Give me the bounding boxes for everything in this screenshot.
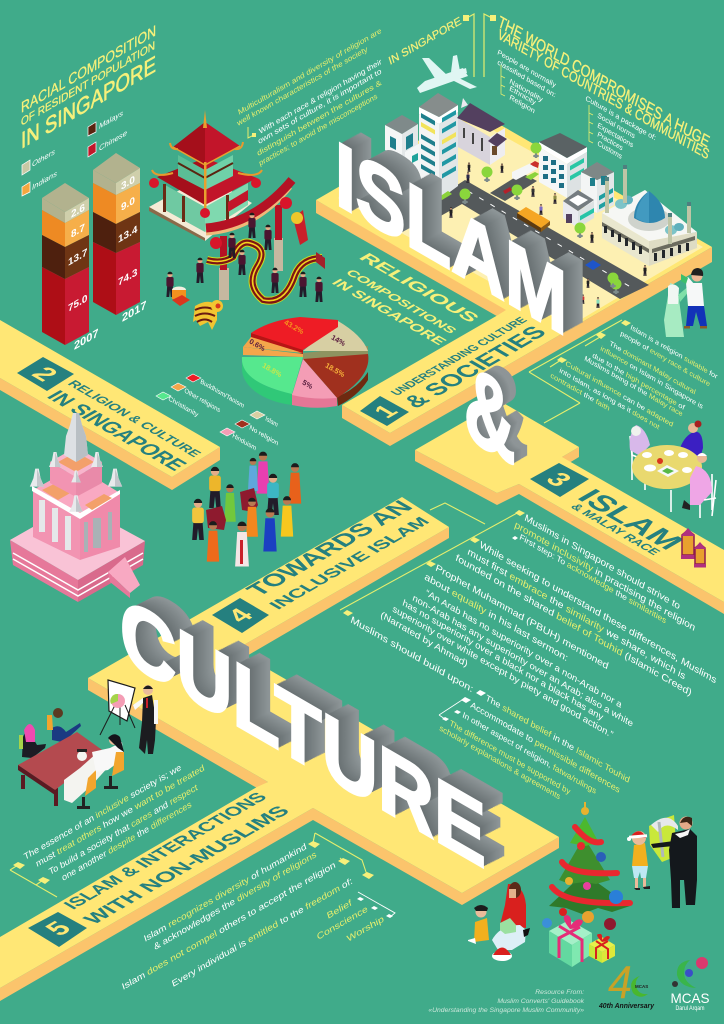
- pie chart: religion shares: 18.5%: [324, 360, 346, 380]
- text: section 5 religious freedom: & acknowledges the diversity of religions: [153, 849, 318, 952]
- text: section 4 towards inclusive islam: promote inclusivity in practising the religion: [513, 519, 697, 633]
- legend: religions: Hinduism: [231, 432, 257, 452]
- illustration: business meeting: [18, 680, 158, 809]
- text: section 4 towards inclusive islam: The shared belief in the Islamic Touhid: [484, 692, 631, 785]
- bar 2017: 2017: [122, 297, 147, 325]
- illustration: dragon dance: [166, 210, 325, 306]
- heading: religious compositions: [328, 250, 484, 347]
- legend: religions: Other religions: [183, 387, 221, 414]
- text: section 1 islam and culture: [549, 324, 719, 431]
- text: section 5 inclusive society: one another despite the differences: [61, 799, 193, 883]
- heading: islam and malay race: & MALAY RACE: [567, 501, 664, 557]
- text: classification lists: Expectations: [596, 122, 634, 150]
- text: resource credit: «Understanding the Singapore Muslim Community»: [428, 1007, 584, 1014]
- text: section 5 religious freedom: Islam does not compel others to accept the religion: [121, 859, 337, 992]
- text: section 1 islam and culture: Cultural influence can be adapted: [564, 360, 674, 429]
- building: right tower: [581, 162, 614, 213]
- text: section 4 towards inclusive islam: First step: To acknowledge the similarities: [518, 532, 667, 625]
- text: section 5 inclusive society: The essence of an inclusive society is; we: [23, 762, 182, 862]
- text: multiculturalism paragraph: With each race & religion having their: [258, 57, 383, 136]
- illustration: father giving gift to boy: [627, 815, 697, 908]
- text: section 1 islam and culture: into Islam, as long as it does not: [558, 367, 660, 431]
- bar chart: racial composition: [42, 153, 147, 353]
- text: section 1 islam and culture: contradict the faith: [549, 372, 611, 413]
- text: multiculturalism paragraph: practices; to avoid the misconceptions: [258, 91, 379, 168]
- text: section 1 islam and culture: people of every race & culture: [619, 330, 711, 389]
- legend: religions: Christianity: [167, 395, 200, 419]
- number box 2: 2: [25, 363, 64, 385]
- number box 1 and heading: UNDERSTANDING CULTURE: [387, 315, 530, 398]
- number box 5: [28, 912, 87, 947]
- text: multiculturalism paragraph: well known characteristics of the society: [235, 44, 369, 128]
- heading: towards an inclusive islam: INCLUSIVE ISLAM: [265, 514, 434, 612]
- bar 2007: 2007: [74, 325, 99, 353]
- logo: 40th anniversary: 40th Anniversary: [598, 1001, 655, 1010]
- icon: airplane: [417, 55, 477, 93]
- panel: ampersand platform and band 3: [415, 401, 724, 614]
- text: section 4 towards inclusive islam: non-Arab has any superiority over an Arab; also a white: [411, 592, 634, 729]
- text: resource credit: Resource From:: [535, 989, 584, 996]
- text: section 5 religious freedom: Conscience: [316, 903, 369, 942]
- text: section 4 towards inclusive islam: In other aspect of religion, fatwa/rulings: [461, 710, 597, 796]
- text: section 4 towards inclusive islam: superiority over white except by piety and good action.”: [391, 603, 614, 740]
- heading: religion and culture in singapore: RELIGION & CULTURE: [64, 378, 205, 459]
- heading: religious compositions: RELIGIOUS: [355, 250, 484, 325]
- text: classification lists: Religion: [508, 94, 536, 115]
- pie chart: religion shares: 18.8%: [261, 360, 283, 380]
- building: mosque: [602, 165, 697, 266]
- text: classification lists: Culture is a package of:: [584, 95, 657, 142]
- icon: lion dance: [193, 300, 223, 330]
- icon: gifts: [549, 915, 615, 967]
- text: section 4 towards inclusive islam: The difference must be supported by: [448, 718, 571, 796]
- illustration: chinese pagoda: [149, 110, 262, 241]
- legend: religions: Buddhism/Taoism: [199, 378, 245, 410]
- text: section 4 towards inclusive islam: founded on the shared belief of Touhid (Islamic Creed): [454, 552, 693, 698]
- logo: mcas darul arqam: Darul Arqam: [676, 1005, 704, 1012]
- 3D title: ISLAM: ISLAM: [335, 122, 567, 357]
- text: multiculturalism paragraph: distinguish between the cultures &: [256, 78, 382, 158]
- building: church: [457, 98, 507, 165]
- text: multiculturalism paragraph: own sets of culture, it is important to: [257, 66, 383, 146]
- heading: in singapore with bracket: [387, 14, 496, 77]
- brackets: section 4: [340, 503, 525, 616]
- heading: islam and interactions: WITH NON-MUSLIMS: [79, 803, 295, 928]
- heading: religious compositions: IN SINGAPORE: [328, 276, 451, 347]
- text: classification lists: Social norms: [596, 112, 636, 141]
- heading: religious compositions: COMPOSITIONS: [342, 267, 460, 336]
- text: section 4 towards inclusive islam: [349, 512, 718, 801]
- building: small front block: [563, 190, 594, 228]
- illustration: christmas tree: [542, 802, 630, 930]
- text: section 5 religious freedom: Every individual is entitled to the freedom of:: [171, 875, 354, 989]
- heading: racial composition: OF RESIDENT POPULATION: [21, 38, 155, 129]
- heading: in singapore with bracket: IN SINGAPORE: [387, 15, 463, 68]
- text: section 4 towards inclusive islam: about equality in his last sermon:: [423, 571, 569, 663]
- pie chart: religion shares: 43.2%: [283, 317, 305, 337]
- text: section 5 inclusive society: must treat others how we want to be treated: [35, 762, 206, 869]
- text: section 1 islam and culture: The dominant Malay cultural: [608, 340, 697, 397]
- text: section 1 islam and culture: influence on Islam in Singapore is: [599, 345, 704, 411]
- bar 2007: [42, 183, 99, 353]
- illustration: mother and child: [468, 882, 530, 961]
- number box 3: [530, 463, 589, 497]
- legend: religions: [156, 374, 279, 452]
- number box 4: 4: [221, 604, 260, 627]
- panel: culture platform with bands 4 and 5: [0, 497, 559, 1001]
- text: section 4 towards inclusive islam: Accommodate to permissible differences: [469, 699, 621, 795]
- text: section 4 towards inclusive islam: must first embrace the similarity we share, which is: [466, 546, 687, 682]
- legend: racial groups: Chinese: [99, 128, 127, 153]
- text: section 5 religious freedom: Worship: [346, 913, 385, 944]
- brackets: section 1: [529, 320, 631, 423]
- pie chart: religion shares: 14%: [330, 332, 346, 349]
- number box 1 and heading: [360, 315, 553, 426]
- bar 2007: 75.0: [68, 292, 87, 315]
- text: section 4 towards inclusive islam: Muslims should build upon:: [349, 614, 475, 694]
- text: section 5 inclusive society: To build a society that cares and respect: [48, 782, 199, 877]
- number box 5: 5: [39, 917, 78, 940]
- text: multiculturalism paragraph: [235, 26, 383, 168]
- bar 2017: 74.3: [118, 266, 137, 289]
- text: section 1 islam and culture: Muslims being of the Malay race: [583, 355, 684, 419]
- text: section 1 islam and culture: Islam is a religion suitable for: [629, 324, 719, 381]
- bar 2017: [93, 153, 147, 325]
- legend: religions: Islam: [264, 415, 279, 429]
- legend: religions: No religion: [248, 424, 279, 448]
- building: tall tower: [419, 93, 458, 200]
- panel: band 2: [0, 320, 220, 490]
- heading: religion and culture in singapore: IN SINGAPORE: [42, 387, 192, 474]
- heading: racial composition: RACIAL COMPOSITION: [21, 22, 156, 117]
- pie chart: religion shares: 0.6%: [248, 336, 266, 354]
- bar 2007: 13.7: [68, 246, 87, 269]
- pie chart: religion shares: [242, 317, 368, 408]
- logo: mcas darul arqam: [670, 957, 710, 1012]
- text: classification lists: classified based on:: [496, 59, 557, 99]
- bar 2007: 8.7: [71, 222, 85, 241]
- icon: lanterns: [681, 528, 706, 568]
- text: multiculturalism paragraph: Multiculturalism and diversity of religion are: [237, 26, 382, 117]
- text: section 5 religious freedom: Belief: [326, 897, 353, 921]
- number box 1 and heading: & SOCIETIES: [398, 322, 553, 412]
- bar 2017: 9.0: [121, 195, 135, 214]
- number box 4: [212, 598, 269, 633]
- illustration: greeting couple: [664, 268, 707, 337]
- text: section 5 religious freedom: [121, 841, 395, 992]
- 3D title: CULTURE: CULTURE: [120, 577, 486, 889]
- brackets: section 5: [10, 833, 374, 897]
- logo: 40th anniversary: [598, 956, 655, 1010]
- legend: racial groups: [22, 109, 127, 196]
- text: section 4 towards inclusive islam: Muslims in Singapore should strive to: [523, 512, 681, 611]
- building: mid block: [539, 133, 587, 198]
- trees, vehicles and pedestrians: [439, 142, 647, 308]
- legend: racial groups: Indians: [32, 169, 57, 192]
- logo: 40th anniversary: 4: [608, 956, 632, 1008]
- illustration: hindu temple: [10, 413, 145, 602]
- illustration: indian community group: [192, 452, 301, 566]
- bar 2017: 3.0: [121, 174, 135, 193]
- text: section 4 towards inclusive islam: (Narrated by Ahmad): [379, 609, 469, 669]
- heading: islam and interactions: ISLAM & INTERACTIONS: [59, 789, 271, 912]
- text: classification lists: Ethnicity: [508, 85, 537, 107]
- legend: racial groups: Others: [32, 147, 55, 169]
- text: section 4 towards inclusive islam: has no superiority over a black nor a black has any: [401, 597, 605, 723]
- road: [437, 173, 649, 299]
- text: section 4 towards inclusive islam: Prophet Muhammad (PBUH) mentioned: [434, 562, 610, 671]
- number box 2: [17, 357, 74, 391]
- logo: mcas darul arqam: MCAS: [670, 990, 710, 1006]
- pie chart: religion shares: 5%: [301, 377, 314, 391]
- text: section 5 religious freedom: Islam recognizes diversity of humankind: [143, 841, 308, 944]
- text: classification lists: Nationality: [508, 78, 544, 104]
- logo: 40th anniversary: MCAS: [635, 984, 648, 989]
- building: small left block: [385, 115, 428, 172]
- number box 3: 3: [539, 468, 578, 491]
- heading: towards an inclusive islam: TOWARDS AN: [241, 497, 419, 600]
- illustration: family dining table: [630, 420, 716, 518]
- text: resource credit: [428, 989, 585, 1014]
- text: section 4 towards inclusive islam: scholarly explanations & agreements: [438, 723, 561, 801]
- number box 1 and heading: 1: [368, 401, 404, 422]
- text: classification lists: People are normally: [496, 49, 557, 90]
- text: section 1 islam and culture: due to the high percentage of: [591, 352, 685, 412]
- bar 2007: 2.6: [71, 202, 85, 221]
- text: classification lists: Practices: [596, 131, 624, 153]
- legend: racial groups: Malays: [99, 109, 123, 131]
- heading: racial composition: IN SINGAPORE: [21, 52, 156, 155]
- heading: islam and malay race: ISLAM: [570, 485, 690, 555]
- text: section 4 towards inclusive islam: While seeking to understand these differences, Muslims: [478, 539, 718, 686]
- bar 2017: 13.4: [118, 223, 137, 246]
- text: resource credit: Muslim Converts' Guidebook: [497, 998, 585, 1005]
- illustration: chinese arch: [206, 180, 292, 300]
- 3D ampersand: &: [464, 338, 515, 489]
- text: section 4 towards inclusive islam: “An Arab has no superiority over a non-Arab nor a: [424, 587, 623, 710]
- panel: city platform with band 1: [316, 93, 712, 446]
- text: classification lists: [496, 49, 657, 161]
- text: classification lists: Customs: [596, 140, 623, 161]
